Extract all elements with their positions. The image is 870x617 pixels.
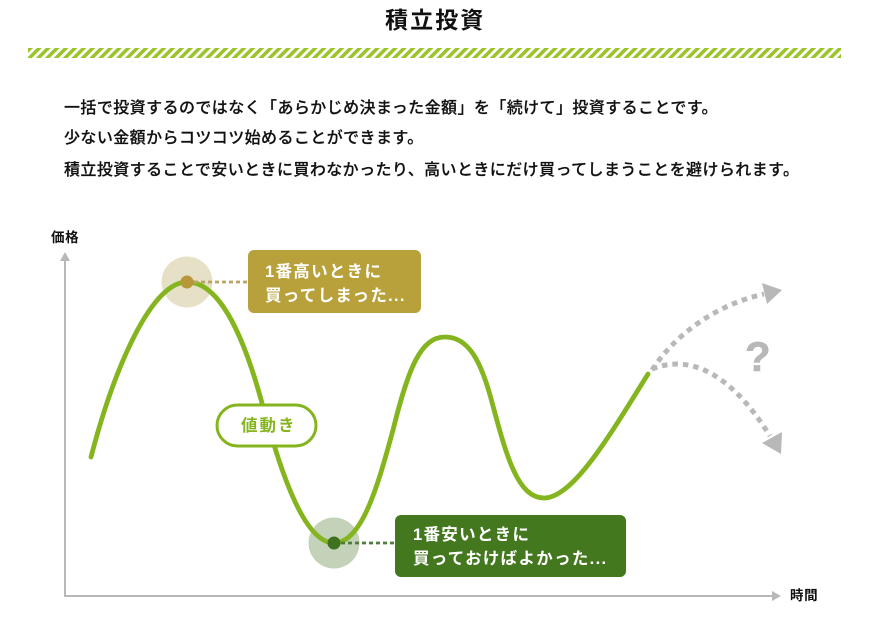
y axis	[60, 252, 70, 597]
line 2: 少ない金額からコツコツ始めることができます。	[64, 130, 424, 147]
x axis label: 時間	[790, 587, 818, 603]
callout: highest price: 買ってしまった...	[265, 286, 406, 305]
title: 積立投資	[385, 7, 485, 33]
label: price movement: 値動き	[241, 416, 296, 435]
y axis label: 価格	[51, 229, 79, 245]
x axis	[64, 591, 781, 601]
callout: highest price	[248, 250, 421, 313]
callout: lowest price: 1番安いときに	[413, 525, 530, 544]
label: price movement	[217, 405, 316, 446]
low point connector	[341, 542, 395, 544]
question mark: ?	[745, 333, 771, 380]
description text	[64, 99, 799, 179]
callout: highest price: 1番高いときに	[265, 261, 382, 281]
callout: lowest price	[395, 515, 626, 577]
low point marker	[328, 536, 340, 550]
low point halo	[308, 518, 360, 568]
high point halo	[162, 256, 212, 308]
arrow: downward scenario	[652, 364, 782, 454]
callout: lowest price: 買っておけばよかった...	[413, 549, 607, 568]
high point marker	[180, 276, 194, 288]
line 3: 積立投資することで安いときに買わなかったり、高いときにだけ買ってしまうことを避けられます。	[64, 162, 799, 179]
high point connector	[194, 281, 248, 283]
line 1: 一括で投資するのではなく「あらかじめ決まった金額」を「続けて」投資することです。	[64, 100, 718, 117]
price curve	[91, 282, 648, 543]
arrow: upward scenario	[652, 283, 782, 370]
